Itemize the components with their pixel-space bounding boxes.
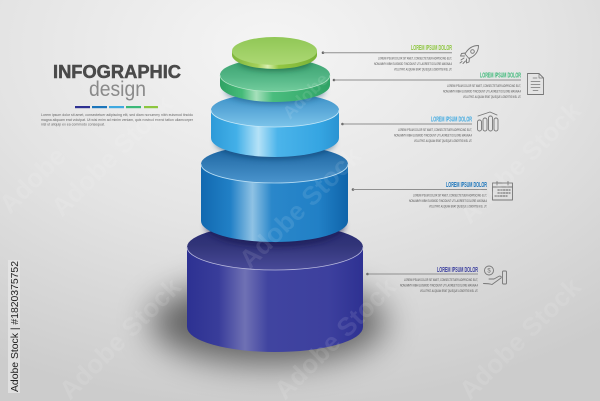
intro paragraph: nisl ut aliquip ex ea commodo consequat. bbox=[41, 122, 105, 126]
contact shadow under cylinder 1 bbox=[239, 55, 311, 71]
callout 1 text: LOREM IPSUM DOLOR SIT AMET, CONSECTETUER ADIPISCING ELIT, bbox=[378, 56, 452, 60]
callout 5 bbox=[366, 265, 478, 293]
callout 3 bbox=[341, 114, 472, 143]
callout 1 heading: LOREM IPSUM DOLOR bbox=[411, 43, 452, 52]
callout 4 text bbox=[409, 192, 487, 208]
title block bbox=[41, 62, 194, 126]
icon: hand with coin bbox=[484, 266, 506, 284]
icon: calendar bbox=[492, 182, 512, 200]
subheading: design: design bbox=[89, 78, 146, 101]
watermark: Adobe bbox=[279, 69, 332, 123]
callout 3 text bbox=[394, 127, 472, 143]
callout 5 text bbox=[400, 277, 478, 293]
intro paragraph: magna aliquam erat volutpat. Ut wisi enim ad minim veniam, quis nostrud exerci tation ullamcorper bbox=[41, 118, 194, 122]
cylinder 4: mid blue bbox=[201, 145, 348, 242]
callout 5 text: VOLUTPAT. ALIQUAM ERAT QUISQUE LOBORTIS NISL UT. bbox=[420, 288, 478, 293]
callout 2 heading: LOREM IPSUM DOLOR bbox=[480, 70, 521, 80]
watermark: Adobe Stock bbox=[453, 95, 587, 229]
heading: INFOGRAPHIC: INFOGRAPHIC bbox=[53, 62, 181, 82]
cylinder 2: green bbox=[220, 58, 330, 102]
icon: hand with coin: $ bbox=[487, 268, 491, 274]
callout 4 text: LOREM IPSUM DOLOR SIT AMET, CONSECTETUER ADIPISCING ELIT, bbox=[413, 192, 487, 198]
callout 2 text: LOREM IPSUM DOLOR SIT AMET, CONSECTETUER ADIPISCING ELIT, bbox=[447, 83, 521, 88]
side credit label: Adobe Stock | #1820375752 bbox=[9, 261, 21, 392]
callout 2 text: VOLUTPAT. ALIQUAM ERAT QUISQUE LOBORTIS NISL UT. bbox=[463, 94, 521, 99]
cylinder 5: dark blue base bbox=[187, 224, 363, 352]
callout 1 text: NONUMMY NIBH EUISMOD TINCIDUNT UT LAOREET DOLORE MAGNA A bbox=[374, 61, 452, 66]
callout 2 bbox=[333, 70, 521, 99]
watermark: Adobe Stock bbox=[45, 88, 179, 222]
contact shadow under cylinder 3 bbox=[215, 125, 335, 159]
callout 5 text: LOREM IPSUM DOLOR SIT AMET, CONSECTETUER ADIPISCING ELIT, bbox=[404, 277, 478, 282]
callout 4 text: NONUMMY NIBH EUISMOD TINCIDUNT UT LAOREET DOLORE MAGNA A bbox=[409, 198, 487, 203]
callout 3 text: NONUMMY NIBH EUISMOD TINCIDUNT UT LAOREET DOLORE MAGNA A bbox=[394, 132, 472, 138]
cylinder 3: light blue bbox=[211, 93, 339, 157]
callout 2 text bbox=[443, 83, 521, 99]
intro paragraph bbox=[41, 113, 194, 126]
callout 2 text: NONUMMY NIBH EUISMOD TINCIDUNT UT LAOREET DOLORE MAGNA A bbox=[443, 88, 521, 94]
callout 4 bbox=[352, 180, 487, 208]
callout 3 text: VOLUTPAT. ALIQUAM ERAT QUISQUE LOBORTIS NISL UT. bbox=[414, 138, 472, 143]
contact shadow under cylinder 4 bbox=[205, 205, 345, 247]
callout 1 text: VOLUTPAT. ALIQUAM ERAT QUISQUE LOBORTIS NISL UT. bbox=[394, 66, 452, 72]
callout 3 heading: LOREM IPSUM DOLOR bbox=[431, 114, 472, 124]
callout 5 text: NONUMMY NIBH EUISMOD TINCIDUNT UT LAOREET DOLORE MAGNA A bbox=[400, 282, 478, 288]
callout 3 text: LOREM IPSUM DOLOR SIT AMET, CONSECTETUER ADIPISCING ELIT, bbox=[398, 127, 472, 132]
pyramid ground shadow bbox=[150, 280, 386, 364]
icon: bar chart bbox=[478, 112, 498, 131]
callout 4 heading: LOREM IPSUM DOLOR bbox=[446, 180, 487, 189]
contact shadow under cylinder 2 bbox=[225, 78, 325, 104]
callout 4 text: VOLUTPAT. ALIQUAM ERAT QUISQUE LOBORTIS NISL UT. bbox=[429, 204, 487, 208]
callout 1 bbox=[322, 43, 452, 72]
icon: document bbox=[528, 74, 544, 94]
colour key bars bbox=[75, 106, 158, 108]
icon: rocket bbox=[460, 46, 478, 64]
intro paragraph: Lorem ipsum dolor sit amet, consectetuer adipiscing elit, sed diam nonummy nibh euismod tincidu bbox=[41, 113, 193, 117]
callout 5 heading: LOREM IPSUM DOLOR bbox=[437, 265, 478, 274]
callout 1 text bbox=[374, 56, 452, 72]
watermark: Adobe Stock bbox=[233, 140, 367, 274]
cylinder 1: lime green top bbox=[232, 37, 317, 69]
